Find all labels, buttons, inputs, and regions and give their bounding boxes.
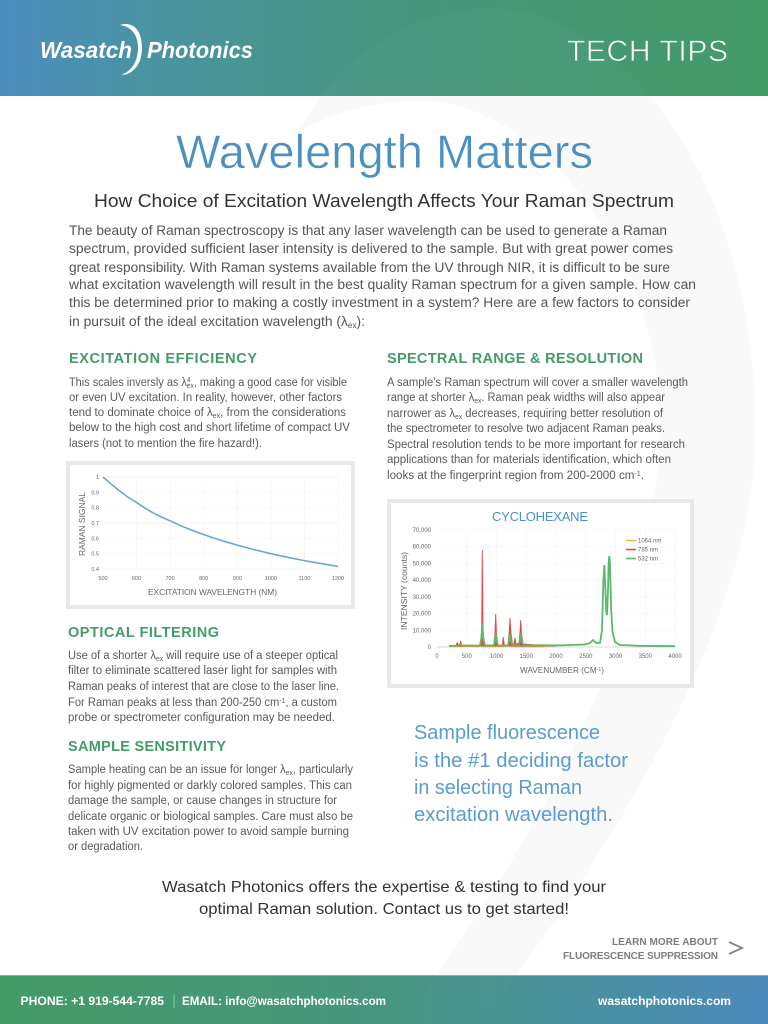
y axis labels: 70,000 <box>413 528 432 534</box>
text: spectral range: . Raman peak widths will also appear <box>481 392 665 404</box>
link: learn more: LEARN MORE ABOUT <box>612 937 718 948</box>
y axis title: INTENSITY (counts) <box>400 552 409 630</box>
y axis labels: 0.6 <box>91 536 99 542</box>
text: sample sensitivity: delicate organic or biological samples. Care must also be <box>68 811 353 823</box>
intro paragraph: ex <box>348 321 357 330</box>
text: excitation efficiency: 4 <box>187 377 191 384</box>
x axis labels: 500 <box>462 654 472 660</box>
contact details: PHONE: +1 919-544-7785 <box>20 994 164 1008</box>
call to action: optimal Raman solution. Contact us to get started! <box>199 901 569 918</box>
text: excitation efficiency: ex <box>213 413 221 420</box>
legend: 1064 nm <box>638 538 661 544</box>
link: learn more <box>563 937 718 962</box>
text: sample sensitivity: or degradation. <box>68 841 143 853</box>
785 nm trace <box>449 550 556 646</box>
text: sample sensitivity: , particularly <box>293 764 353 776</box>
text: sample sensitivity <box>68 764 353 853</box>
text: spectral range: applications than for materials identification, which often <box>387 454 671 466</box>
text: spectral range: ex <box>455 414 463 421</box>
y axis labels: 0.9 <box>91 490 99 496</box>
panel: spectral range and resolution <box>387 351 688 482</box>
legend <box>626 538 661 562</box>
1064 nm trace <box>449 642 545 646</box>
footer band <box>0 975 768 1024</box>
x axis labels: 900 <box>233 576 242 582</box>
text: optical filtering: -1 <box>279 698 285 705</box>
x axis labels: 3000 <box>609 654 623 660</box>
website: wasatchphotonics.com <box>597 994 731 1008</box>
text: optical filtering: ex <box>156 656 164 663</box>
y axis labels <box>91 475 99 573</box>
header band <box>0 0 768 640</box>
call to action <box>162 879 607 918</box>
callout: sample fluorescence: Sample fluorescence <box>414 722 600 744</box>
text: optical filtering: Raman peaks of interest that are close to the laser line. <box>68 681 339 693</box>
call to action: Wasatch Photonics offers the expertise & testing to find your <box>162 879 607 896</box>
text: excitation efficiency: This scales inversly as λ <box>69 377 193 389</box>
y axis labels: 10,000 <box>413 628 432 634</box>
intro paragraph: The beauty of Raman spectroscopy is that any laser wavelength can be used to generate a Raman <box>69 223 667 238</box>
x axis labels: 1500 <box>520 654 534 660</box>
text: spectral range: range at shorter λ <box>387 392 477 404</box>
x axis labels: 600 <box>132 576 141 582</box>
text: spectral range: ex <box>474 398 482 405</box>
y axis labels: 50,000 <box>413 561 432 567</box>
x axis title: ) <box>601 666 604 675</box>
text: excitation efficiency <box>69 377 350 450</box>
text: sample sensitivity: ex <box>286 770 293 777</box>
background swoosh <box>300 8 755 1024</box>
heading: sample sensitivity: SAMPLE SENSITIVITY <box>68 739 226 755</box>
subtitle: How Choice of Excitation Wavelength Affects Your Raman Spectrum <box>94 190 674 211</box>
text: spectral range: A sample’s Raman spectrum will cover a smaller wavelength <box>387 377 688 389</box>
text: spectral range: looks at the fingerprint region from 200-2000 cm <box>387 470 632 482</box>
y axis labels: 0.7 <box>91 521 99 527</box>
chart: cyclohexane spectrum <box>389 501 692 686</box>
chart: raman signal vs excitation wavelength <box>68 463 353 607</box>
x axis title: EXCITATION WAVELENGTH (NM) <box>148 588 277 597</box>
x axis labels: 500 <box>98 576 108 582</box>
text: optical filtering <box>68 650 339 724</box>
logo: Wasatch <box>40 37 132 63</box>
x axis labels: 1000 <box>265 576 277 582</box>
callout: sample fluorescence <box>414 722 628 826</box>
text: excitation efficiency: tend to dominate choice of λ <box>69 407 213 419</box>
x axis labels: 0 <box>435 654 439 660</box>
text: excitation efficiency: or even UV excitation. In reality, however, other factors <box>69 392 342 404</box>
x axis labels: 1200 <box>332 576 344 582</box>
x axis labels: 4000 <box>668 654 682 660</box>
legend: 532 nm <box>638 556 658 562</box>
y axis labels: 20,000 <box>413 612 432 618</box>
x axis labels: 2500 <box>579 654 593 660</box>
panel: optical filtering <box>68 625 339 724</box>
y axis labels: 30,000 <box>413 595 432 601</box>
text: excitation efficiency: , from the considerations <box>220 407 346 419</box>
y axis labels: 0 <box>428 645 432 651</box>
x axis labels <box>435 654 682 660</box>
text: optical filtering: Use of a shorter λ <box>68 650 159 662</box>
y axis labels: 60,000 <box>413 545 432 551</box>
x axis title: WAVENUMBER (CM <box>520 666 595 675</box>
x axis labels: 1000 <box>490 654 504 660</box>
x axis labels <box>98 576 344 582</box>
chart title: CYCLOHEXANE <box>492 509 588 524</box>
text: optical filtering: For Raman peaks at less than 200-250 cm <box>68 697 285 709</box>
text: spectral range: -1 <box>634 471 641 478</box>
y axis labels: 0.8 <box>91 506 99 512</box>
section tag: TECH TIPS <box>567 35 728 68</box>
text: excitation efficiency: ex <box>187 383 194 390</box>
panel: sample sensitivity <box>68 739 353 853</box>
y axis labels: 0.4 <box>91 567 99 573</box>
y axis labels: 0.5 <box>91 552 99 558</box>
y axis labels: 40,000 <box>413 578 432 584</box>
intro paragraph: great responsibility. With Raman systems available from the UV through NIR, it is difficult to be sure <box>69 260 670 275</box>
text: spectral range: narrower as λ <box>387 408 457 420</box>
x axis labels: 1100 <box>298 576 310 582</box>
text: excitation efficiency: lasers (not to mention the fire hazard!). <box>69 438 262 450</box>
text: optical filtering: filter to eliminate scattered laser light for samples with <box>68 665 337 677</box>
title: Wavelength Matters <box>176 125 593 178</box>
text: spectral range: . <box>641 470 644 482</box>
intro paragraph: in pursuit of the ideal excitation wavelength (λ <box>69 314 341 329</box>
callout: sample fluorescence: excitation wavelength. <box>414 804 613 826</box>
panel: excitation efficiency <box>69 351 350 450</box>
text: spectral range: Spectral resolution tends to be more important for research <box>387 439 685 451</box>
text: excitation efficiency: , making a good case for visible <box>194 377 347 389</box>
intro paragraph: what excitation wavelength will result in the best quality Raman spectrum for a given sample. How can <box>68 277 696 292</box>
text: excitation efficiency: below to the high cost and short lifetime of compact UV <box>69 422 350 434</box>
callout: sample fluorescence: in selecting Raman <box>414 777 582 799</box>
signal curve <box>103 477 338 566</box>
x axis title: -1 <box>597 667 601 673</box>
heading: spectral range and resolution: SPECTRAL RANGE & RESOLUTION <box>387 351 643 367</box>
text: optical filtering: will require use of a steeper optical <box>163 650 338 662</box>
text: sample sensitivity: for highly pigmented or darkly colored samples. This can <box>68 780 352 792</box>
text: optical filtering: , a custom <box>285 697 337 709</box>
intro paragraph <box>68 223 696 330</box>
icon: chevron arrow <box>729 942 742 954</box>
text: spectral range <box>387 377 688 482</box>
x axis labels: 3500 <box>639 654 653 660</box>
heading: excitation efficiency: EXCITATION EFFICIENCY <box>69 351 257 367</box>
text: optical filtering: probe or spectrometer configuration may be needed. <box>68 712 335 724</box>
callout: sample fluorescence: is the #1 deciding factor <box>414 750 628 772</box>
contact details: EMAIL: info@wasatchphotonics.com <box>182 994 386 1008</box>
intro paragraph: ): <box>357 314 365 329</box>
532 nm trace <box>449 556 675 646</box>
y axis title: RAMAN SIGNAL <box>78 491 87 556</box>
x axis labels: 2000 <box>549 654 563 660</box>
link: learn more: FLUORESCENCE SUPPRESSION <box>563 951 718 962</box>
text: sample sensitivity: taken with UV excitation power to avoid sample burning <box>68 826 349 838</box>
heading: optical filtering: OPTICAL FILTERING <box>68 625 219 641</box>
intro paragraph: this be determined prior to making a costly investment in a system? Here are a few factors to consider <box>69 295 691 310</box>
y axis labels <box>413 528 432 651</box>
contact details <box>20 994 386 1008</box>
x axis labels: 800 <box>199 576 208 582</box>
text: sample sensitivity: damage the sample, or cause changes in structure for <box>68 795 337 807</box>
logo <box>40 24 253 75</box>
y axis labels: 1 <box>96 475 99 481</box>
logo: Photonics <box>147 37 253 63</box>
intro paragraph: spectrum, provided sufficient laser intensity is delivered to the sample. But with great power comes <box>69 241 673 256</box>
text: spectral range: decreases, requiring better resolution of <box>462 408 664 420</box>
text: spectral range: the spectrometer to resolve two adjacent Raman peaks. <box>387 423 665 435</box>
legend: 785 nm <box>638 548 658 554</box>
text: sample sensitivity: Sample heating can be an issue for longer λ <box>68 764 292 776</box>
x axis labels: 700 <box>166 576 175 582</box>
